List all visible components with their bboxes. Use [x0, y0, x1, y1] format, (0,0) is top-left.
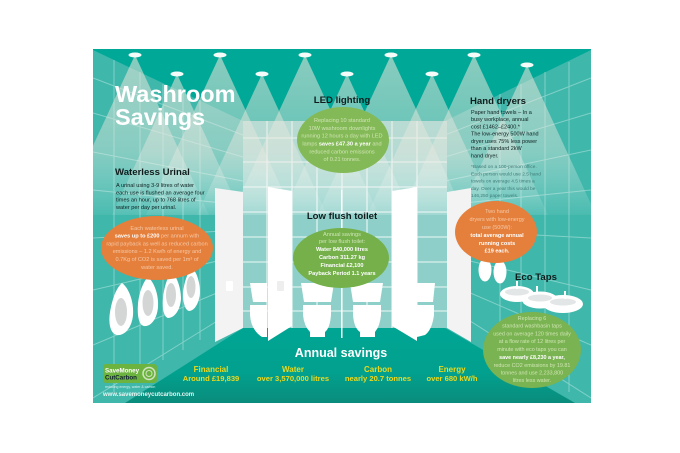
hand dryers footnote: day. Over a year this would be [471, 186, 536, 192]
green callout: eco taps [483, 312, 581, 388]
green callout: eco taps: used on average 120 times daily [493, 332, 571, 338]
stat: financial: Around £19,839 [183, 374, 239, 383]
orange callout: urinal [101, 216, 213, 280]
logo: SaveMoney [105, 368, 140, 374]
stat: energy [426, 365, 478, 383]
orange callout: hand dryers [455, 201, 537, 263]
green callout: toilet [293, 228, 389, 288]
washroom scene [61, 49, 596, 403]
stat: energy: over 680 kW/h [426, 374, 478, 383]
title: Washroom [115, 81, 236, 107]
hand dryers heading: Hand dryers [470, 96, 526, 107]
orange callout: urinal: water saved. [140, 265, 173, 271]
orange callout: hand dryers: £19 each. [485, 248, 510, 254]
back wall tiles [243, 121, 447, 328]
green callout: eco taps: minute with eco taps you can [497, 347, 567, 353]
green callout: LED: 10W washroom downlights [309, 126, 376, 132]
title [115, 81, 236, 130]
left wall [93, 50, 243, 403]
eco taps [500, 281, 583, 313]
green callout: eco taps: tonnes and use 2,233,800 [501, 370, 563, 376]
hand dryers footnote [471, 164, 541, 199]
right wall [445, 50, 591, 403]
title: Savings [115, 104, 205, 130]
hand dryers [478, 258, 506, 284]
stat: financial: Financial [194, 365, 228, 374]
annual savings heading: Annual savings [295, 346, 387, 360]
urinals [109, 268, 200, 335]
stat: carbon [345, 365, 411, 383]
stat: water: Water [282, 365, 304, 374]
hand dryers text: dryer uses 75% less power [471, 139, 537, 145]
green callout: LED: running 12 hours a day with LED [301, 134, 383, 140]
hand dryers text: hand dryer. [471, 154, 499, 160]
green callout: toilet: per low flush toilet: [319, 239, 366, 245]
orange callout: urinal: Each waterless urinal [130, 226, 184, 232]
hand dryers text: busy workplace, annual [471, 117, 528, 123]
toilets [250, 283, 435, 337]
waterless urinal text: each use is flushed an average four [116, 190, 205, 196]
hand dryers footnote: Each person would use 2.5 hand [471, 172, 541, 178]
hand dryers text: Paper hand towels – In a [471, 110, 533, 116]
centre divider [341, 190, 342, 338]
stall partitions [215, 187, 471, 342]
logo: reducing energy, water & carbon [105, 385, 155, 389]
green callout: toilet: Carbon 311.27 kg [319, 255, 366, 261]
logo [103, 364, 157, 389]
green callout: eco taps: save nearly £8,230 a year, [499, 355, 565, 361]
waterless urinal text: times an hour, up to 768 litres of [116, 198, 196, 204]
floor [93, 328, 591, 403]
ceiling lights and beams [61, 52, 596, 215]
orange callout: urinal: 0.7Kg of CO2 is saved per 1m³ of [115, 257, 199, 263]
green callout: toilet: Water 840,000 litres [316, 247, 368, 253]
low flush toilet heading: Low flush toilet [307, 211, 378, 222]
stat: carbon: Carbon [364, 365, 392, 374]
hand dryers footnote: 146,250 paper towels. [471, 193, 518, 199]
website url: www.savemoneycutcarbon.com [102, 392, 194, 398]
logo: CutCarbon [105, 374, 137, 382]
waterless urinal text [115, 183, 205, 211]
hand dryers text: The low-energy 500W hand [471, 132, 539, 138]
hand dryers footnote: *Based on a 100-person office. [471, 164, 537, 170]
eco taps heading: Eco Taps [515, 272, 557, 283]
LED lighting heading: LED lighting [314, 95, 370, 106]
orange callout: urinal: saves up to £200 per annum with [115, 234, 199, 240]
green callout: LED [297, 107, 389, 173]
green callout: LED: reduced carbon emissions [309, 150, 375, 156]
green callout: eco taps: standard washbasin taps [502, 324, 562, 330]
orange callout: hand dryers: use (500W): [482, 225, 512, 231]
green callout: eco taps: reduce CO2 emissions by 19.81 [494, 363, 570, 369]
hand dryers text: cost £1462–£2400.* [471, 124, 521, 130]
waterless urinal text: A urinal using 3-9 litres of water [116, 183, 194, 189]
stat: water: over 3,570,000 litres [257, 374, 329, 383]
green callout: LED: of 0.21 tonnes. [323, 157, 361, 163]
green callout: eco taps: Replacing 6 [518, 316, 546, 322]
green callout: toilet: Financial £2,100 [321, 263, 363, 269]
hand dryers footnote: towels on average 4.5 times a [471, 178, 535, 184]
orange callout: urinal: rapid payback as well as reduced carbon [106, 242, 208, 248]
hand dryers text [471, 110, 539, 160]
stat: carbon: nearly 20.7 tonnes [345, 374, 411, 383]
waterless urinal text: water per day per urinal. [115, 205, 177, 211]
hand dryers text: than a standard 2kW [471, 146, 523, 152]
orange callout: urinal: emissions – 1.2 Kw/h of energy and [113, 249, 201, 255]
green callout: toilet: Annual savings [323, 232, 361, 238]
orange callout: hand dryers: running costs [479, 241, 515, 247]
stat: energy: Energy [438, 365, 466, 374]
green callout: eco taps: at a flow rate of 12 litres per [499, 339, 565, 345]
green callout: toilet: Payback Period 1.1 years [308, 271, 376, 277]
orange callout: hand dryers: Two hand [485, 209, 509, 215]
orange callout: hand dryers: dryers with low-energy [469, 217, 525, 223]
green callout: eco taps: litres less water. [513, 378, 551, 384]
green callout: LED: lamps saves £47.30 a year and [302, 142, 382, 148]
green callout: LED: Replacing 10 standard [314, 118, 370, 124]
waterless urinal heading: Waterless Urinal [115, 167, 190, 178]
stat: financial [183, 365, 239, 383]
ceiling [93, 49, 591, 121]
stat: water [257, 365, 329, 383]
orange callout: hand dryers: total average annual [470, 233, 524, 239]
